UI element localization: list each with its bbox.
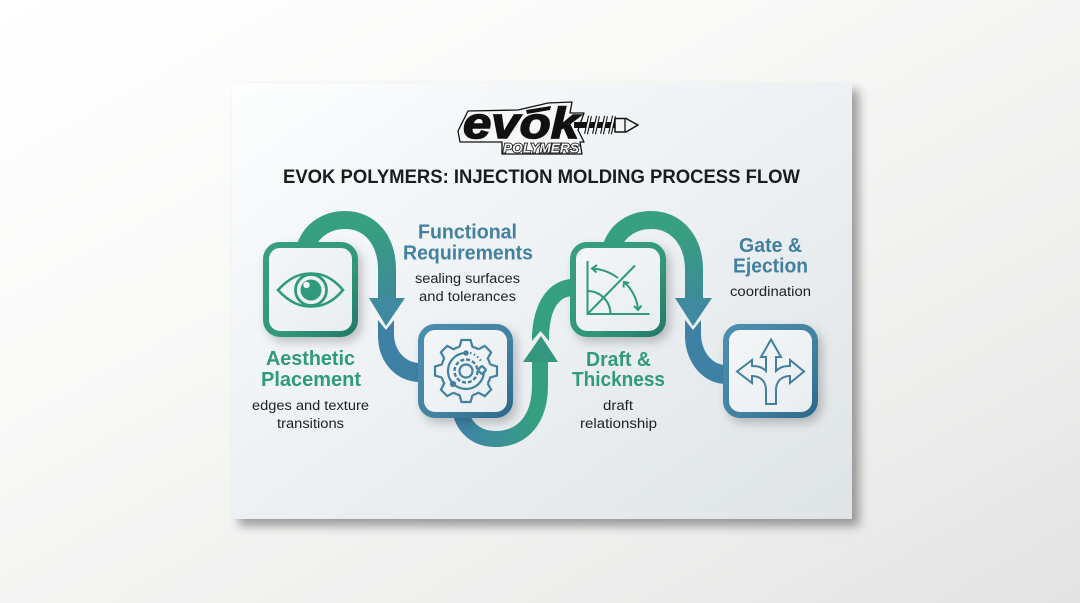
arrow: draft to gate (612, 220, 726, 384)
label: gate and ejection (730, 235, 811, 299)
title: EVOK POLYMERS: INJECTION MOLDING PROCESS FLOW (283, 166, 801, 188)
label: functional requirements (403, 222, 533, 304)
step: functional requirements tile (421, 327, 510, 415)
arrow: functional to draft (461, 279, 574, 439)
label: gate and ejection: Ejection (733, 256, 808, 278)
logo: Evok Polymers: evok (463, 99, 582, 148)
label: draft and thickness (572, 349, 665, 431)
step: aesthetic placement tile (266, 245, 355, 334)
icon: branching arrows (737, 340, 804, 404)
step: gate and ejection tile (726, 327, 815, 415)
icon: eye (278, 274, 343, 306)
label: gate and ejection: coordination (730, 284, 811, 299)
icon: gear (435, 340, 497, 402)
arrow: aesthetic to functional (306, 220, 420, 382)
step: draft and thickness tile (573, 245, 663, 334)
label: draft and thickness: draft (603, 398, 633, 413)
label: aesthetic placement: edges and texture (252, 398, 369, 413)
label: functional requirements: sealing surfaces (415, 271, 520, 286)
label: gate and ejection: Gate & (739, 235, 802, 257)
logo: Evok Polymers: POLYMERS (503, 142, 580, 156)
label: functional requirements: Requirements (403, 242, 533, 264)
label: draft and thickness: Draft & (586, 349, 651, 371)
icon: screw (574, 116, 638, 134)
label: aesthetic placement: Placement (261, 369, 361, 391)
label: draft and thickness: Thickness (572, 369, 665, 391)
label: aesthetic placement (252, 348, 369, 431)
label: functional requirements: and tolerances (419, 289, 516, 304)
label: aesthetic placement: transitions (277, 416, 344, 431)
icon: draft angle (588, 261, 650, 314)
label: draft and thickness: relationship (580, 416, 657, 431)
label: aesthetic placement: Aesthetic (266, 348, 355, 370)
logo: Evok Polymers (458, 99, 638, 156)
label: functional requirements: Functional (418, 222, 517, 244)
panel: process flow card (232, 83, 852, 519)
